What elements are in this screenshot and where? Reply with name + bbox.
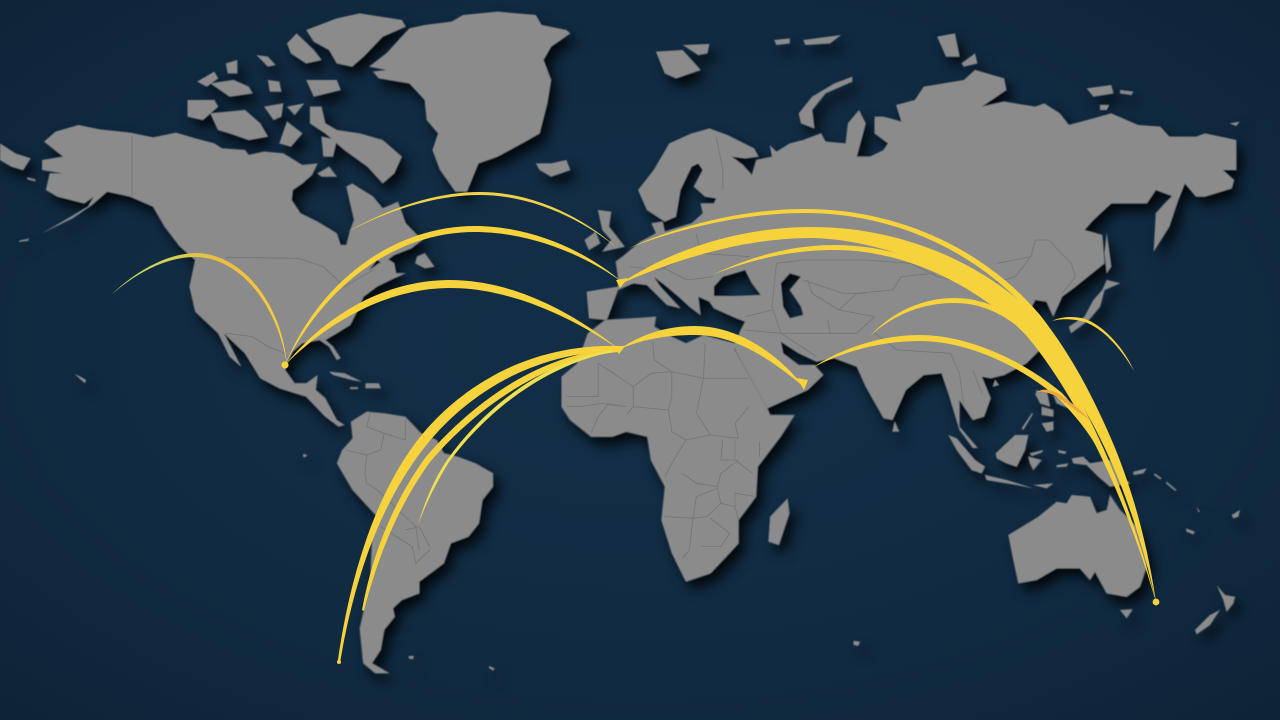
arc: Algeria to southern Pacific xyxy=(338,346,618,663)
Africa and Madagascar xyxy=(561,317,795,582)
arc: Pacific to Mexico xyxy=(111,253,287,365)
country borders xyxy=(132,137,1076,563)
Australia and New Zealand xyxy=(853,468,1240,646)
arc: Hudson Bay to Britain xyxy=(347,192,616,247)
endpoint: Algeria xyxy=(613,346,625,354)
Southeast Asia islands xyxy=(948,390,1130,488)
endpoint: Southern Pacific xyxy=(337,660,341,664)
arc: Mexico to France xyxy=(285,226,622,365)
arc: France to Australia thick xyxy=(620,227,1156,602)
South America xyxy=(303,412,495,673)
endpoint: Mexico xyxy=(281,361,289,369)
endpoint: France xyxy=(616,278,628,288)
arc: Europe to Australia outer xyxy=(629,209,1156,602)
arc: Central Asia to Australia xyxy=(870,298,1156,602)
arc: Algeria to Brazil xyxy=(418,350,612,525)
arc: Algeria to Chile xyxy=(362,349,618,611)
arc: Black Sea to Australia xyxy=(712,245,1156,602)
arc: Mexico to Algeria xyxy=(285,280,620,365)
Greenland and Iceland xyxy=(369,12,570,192)
South America borders xyxy=(346,413,430,563)
Eurasia xyxy=(584,33,1240,448)
arc: Algeria to Arabia xyxy=(618,326,805,388)
Africa borders xyxy=(567,342,760,558)
North America and Arctic islands xyxy=(0,13,434,427)
arc: Japan to Pacific xyxy=(1052,317,1134,371)
Eurasia borders xyxy=(629,137,1076,407)
arc: Philippines small xyxy=(1037,390,1091,421)
endpoint: Australia xyxy=(1153,599,1159,605)
arc: Arabia to New Guinea xyxy=(812,335,1104,460)
North America borders xyxy=(132,137,373,353)
flow arcs xyxy=(111,192,1159,664)
endpoint: Arabia xyxy=(797,378,808,390)
